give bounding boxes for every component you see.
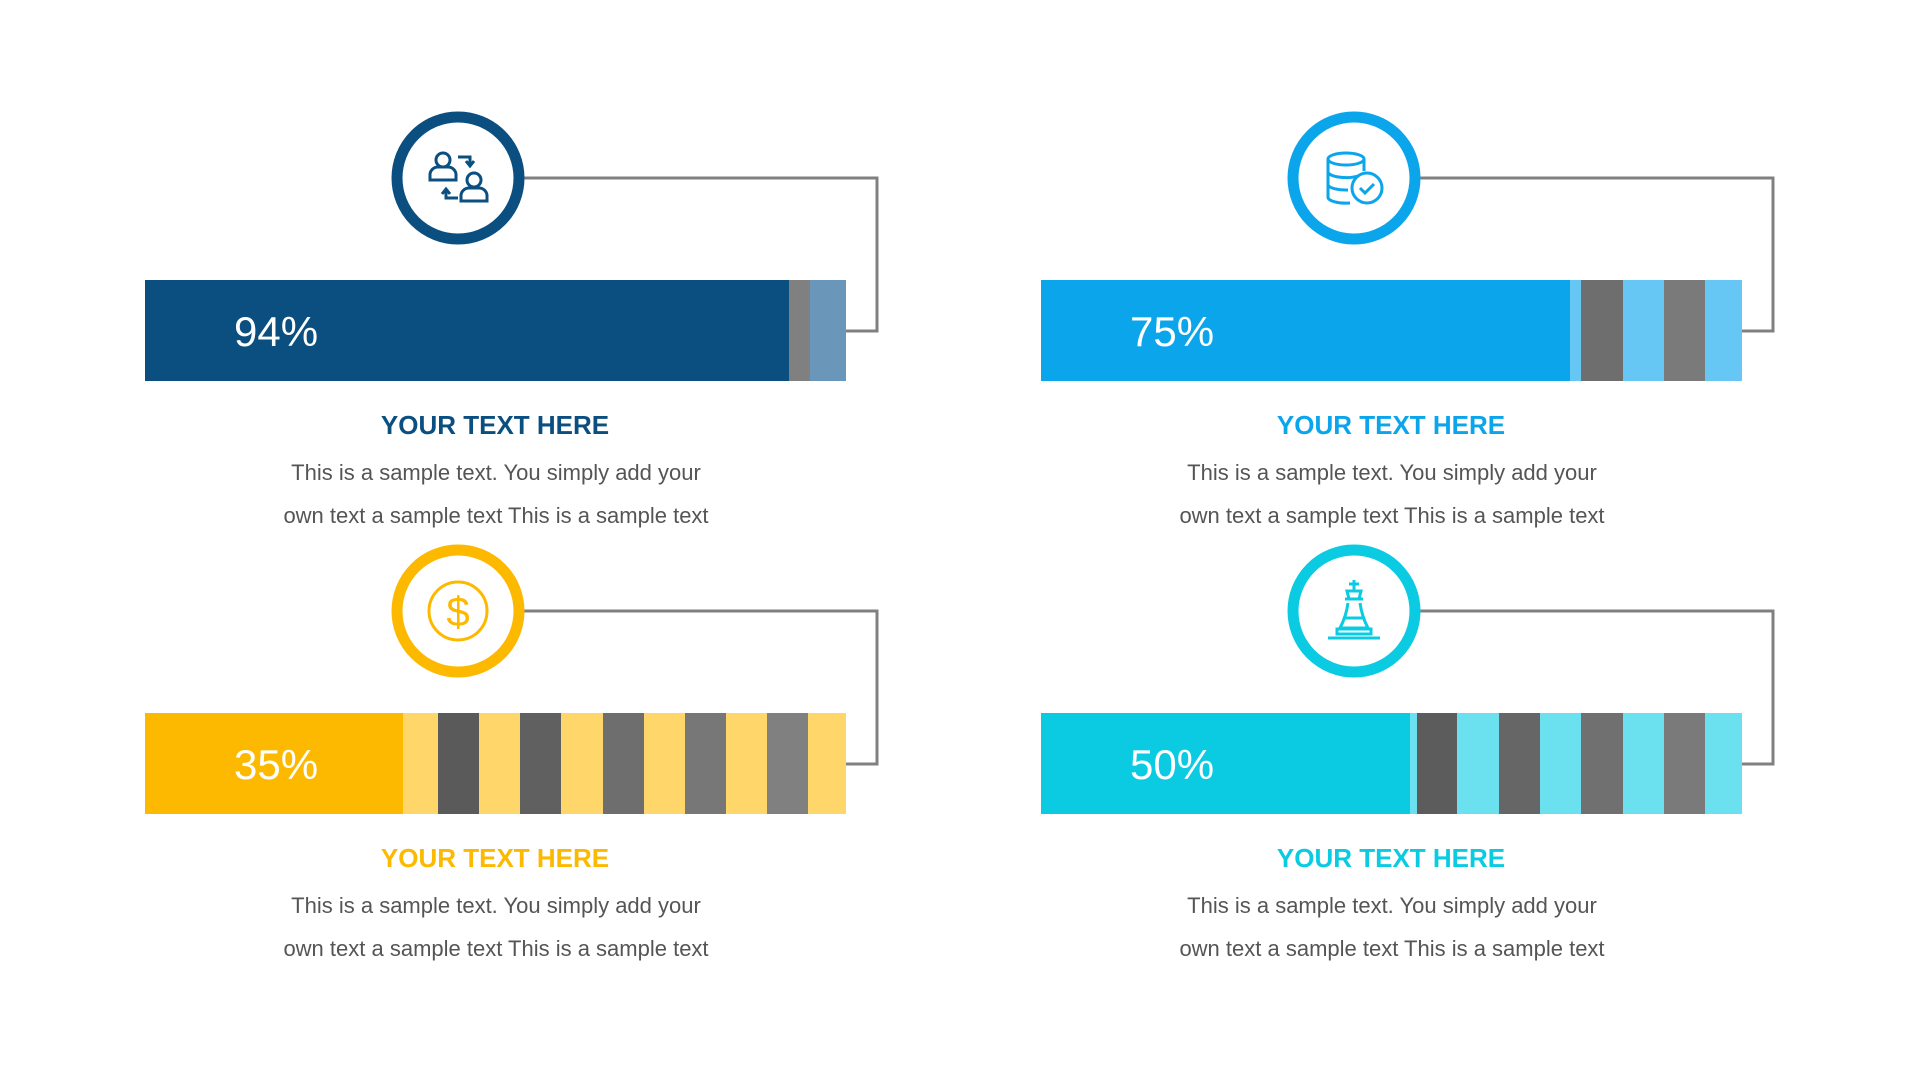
panel: bottom-right 50% bbox=[1041, 550, 1773, 961]
panel: top-left 94% bbox=[145, 117, 877, 528]
text block: own text a sample text This is a sample text bbox=[283, 936, 709, 961]
icon: dollar coin bbox=[397, 550, 519, 672]
heading: YOUR TEXT HERE bbox=[381, 843, 609, 873]
bar chart: 75% bbox=[1041, 280, 1742, 381]
text block: This is a sample text. You simply add your bbox=[291, 460, 701, 485]
text block: This is a sample text. You simply add your bbox=[1187, 460, 1597, 485]
bar chart: 35%: 35% bbox=[234, 741, 318, 788]
connector line bbox=[1420, 611, 1773, 764]
panel: bottom-left 35% bbox=[145, 550, 877, 961]
bar chart: 75%: 75% bbox=[1130, 308, 1214, 355]
connector line bbox=[1420, 178, 1773, 331]
bar chart: 35% bbox=[145, 713, 846, 814]
text block: own text a sample text This is a sample text bbox=[1179, 503, 1605, 528]
text block: This is a sample text. You simply add your bbox=[1187, 893, 1597, 918]
text block: own text a sample text This is a sample text bbox=[283, 503, 709, 528]
connector line bbox=[524, 611, 877, 764]
heading: YOUR TEXT HERE bbox=[381, 410, 609, 440]
heading: YOUR TEXT HERE bbox=[1277, 843, 1505, 873]
bar chart: 50% bbox=[1041, 713, 1742, 814]
heading: YOUR TEXT HERE bbox=[1277, 410, 1505, 440]
text block bbox=[1179, 893, 1605, 961]
icon: dollar coin: $ bbox=[446, 588, 470, 635]
panel: top-right 75% bbox=[1041, 117, 1773, 528]
bar chart: 50%: 50% bbox=[1130, 741, 1214, 788]
bar chart: 94% bbox=[145, 280, 846, 381]
text block bbox=[283, 893, 709, 961]
text block: This is a sample text. You simply add your bbox=[291, 893, 701, 918]
icon: database check bbox=[1293, 117, 1415, 239]
icon: chess king bbox=[1293, 550, 1415, 672]
text block: own text a sample text This is a sample text bbox=[1179, 936, 1605, 961]
text block bbox=[283, 460, 709, 528]
bar chart: 94%: 94% bbox=[234, 308, 318, 355]
text block bbox=[1179, 460, 1605, 528]
icon: people exchange bbox=[397, 117, 519, 239]
connector line bbox=[524, 178, 877, 331]
